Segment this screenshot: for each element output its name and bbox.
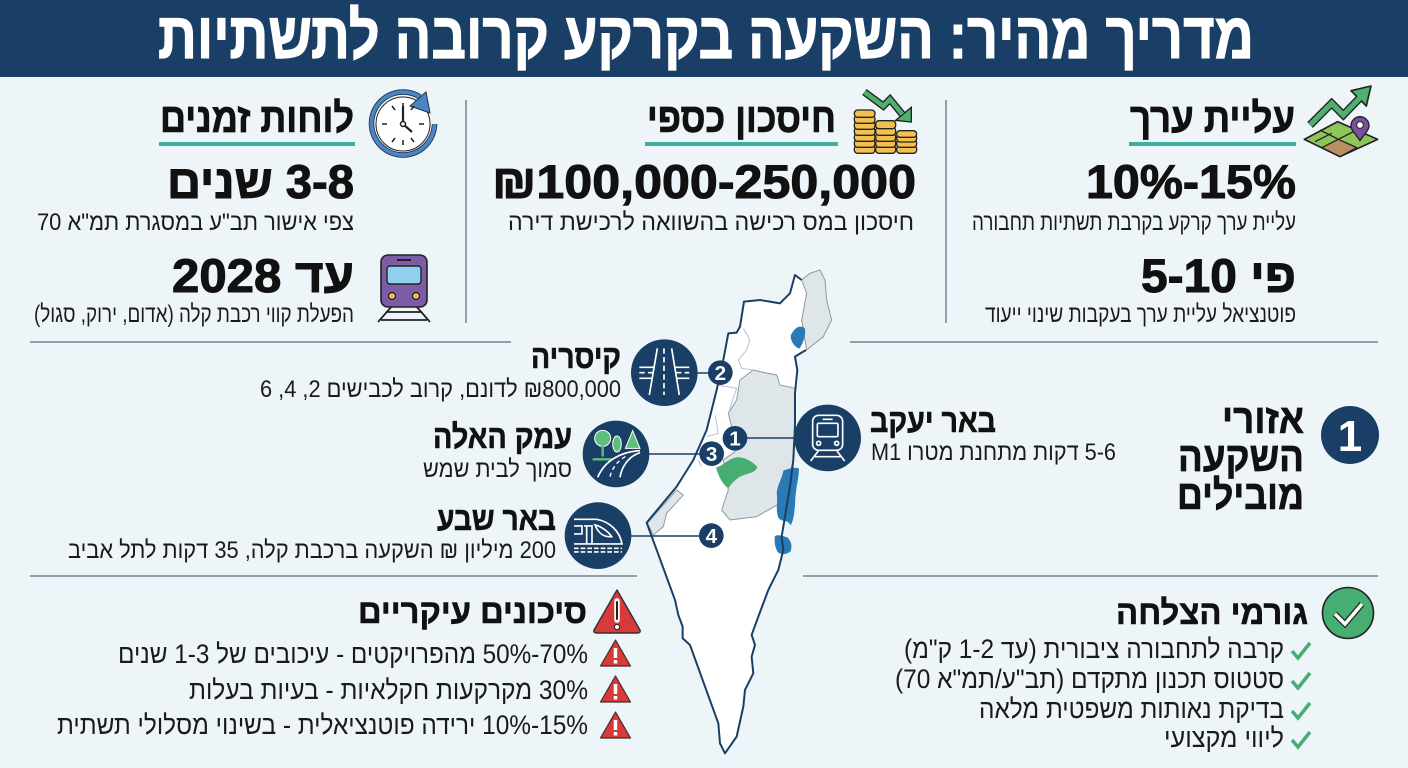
text: purchase tax description: חיסכון במס רכישה בהשוואה לרכישת דירה [508, 209, 914, 236]
location: Be'er Sheva [68, 500, 556, 564]
heading: timelines: לוחות זמנים [160, 95, 354, 141]
panel: timelines [34, 92, 434, 328]
location: Be'er Sheva: באר שבע [437, 500, 556, 537]
success item 1: קרבה לתחבורה ציבורית (עד 1-2 ק"מ) [904, 634, 1284, 664]
location: Be'er Ya'akov: 5-6 דקות מתחנת מטרו M1 [871, 439, 1116, 466]
stat: 3-8 years: 3-8 שנים [167, 155, 354, 208]
stat: 10%-15%: 10%-15% [1086, 155, 1296, 208]
icon: clock with circular arrow [372, 92, 434, 155]
heading: leading investment areas [1177, 396, 1304, 518]
heading: leading investment areas: אזורי [1222, 396, 1304, 442]
heading: leading investment areas: מובילים [1177, 472, 1304, 518]
text: plan approval description: צפי אישור תב"ע במסגרת תמ"א 70 [37, 209, 354, 236]
success item 2: סטטוס תכנון מתקדם (תב"ע/תמ"א 70) [895, 664, 1284, 694]
map of Israel [647, 270, 832, 753]
stat: savings amount: ₪100,000-250,000 [492, 155, 916, 208]
heading: main risks: סיכונים עיקריים [358, 593, 587, 631]
text: light rail description: הפעלת קווי רכבת קלה (אדום, ירוק, סגול) [34, 301, 354, 328]
panel: financial savings [492, 92, 917, 236]
location: Be'er Ya'akov: באר יעקב [870, 402, 996, 439]
text: zoning description: פוטנציאל עליית ערך בעקבות שינוי ייעוד [985, 301, 1296, 328]
panel: value increase [972, 86, 1378, 328]
risk item 2: 30% מקרקעות חקלאיות - בעיות בעלות [189, 675, 588, 705]
heading: leading investment areas: השקעה [1178, 434, 1304, 480]
section badge 1 [1321, 406, 1379, 464]
location: Caesarea: ₪800,000 לדונם, קרוב לכבישים 2, 4, 6 [260, 376, 621, 403]
text: land value description: עליית ערך קרקע בקרבת תשתיות תחבורה [972, 209, 1296, 236]
marker 4 [699, 523, 724, 548]
location: Caesarea [260, 338, 621, 403]
icon: purple light rail train [378, 255, 430, 322]
marker 3 [699, 441, 724, 466]
connector lines [598, 373, 828, 536]
marker 3: 3 [706, 443, 717, 466]
panel: main risks [57, 590, 640, 740]
location: Elah Valley: סמוך לבית שמש [423, 456, 572, 483]
icon: metro train [794, 405, 861, 471]
location: Caesarea: קיסריה [531, 338, 621, 375]
icon: highway [631, 339, 698, 406]
location: Elah Valley [423, 418, 572, 483]
icon: rising arrow over land plot [1304, 86, 1378, 157]
marker 2 [708, 360, 733, 385]
success item 4: ליווי מקצועי [1164, 723, 1284, 753]
risk item 1: ⁦50%-70%⁩ מהפרויקטים - עיכובים של 1-3 שנים [118, 639, 588, 669]
marker 4: 4 [706, 525, 718, 548]
stat: until 2028: עד 2028 [172, 249, 354, 302]
success item 3: בדיקת נאותות משפטית מלאה [979, 694, 1284, 724]
panel: leading investment areas [68, 338, 1379, 569]
marker 1: 1 [729, 428, 741, 451]
risk item 3: ⁦10%-15%⁩ ירידה פוטנציאלית - בשינוי מסלולי תשתית [57, 710, 588, 740]
marker 2: 2 [715, 362, 726, 385]
icon: coin stacks with falling arrow [854, 92, 917, 153]
heading: success factors: גורמי הצלחה [1116, 594, 1308, 632]
stat: times 5-10: פי 5-10 [1141, 249, 1296, 302]
location: Elah Valley: עמק האלה [433, 418, 572, 455]
panel: success factors [895, 588, 1374, 753]
icon: high-speed train [565, 502, 631, 569]
section badge 1: 1 [1338, 412, 1362, 461]
location: Be'er Sheva: 200 מיליון ₪ השקעה ברכבת קלה, 35 דקות לתל אביב [68, 537, 556, 564]
marker 1 [723, 426, 747, 451]
heading: value increase: עליית ערך [1130, 95, 1295, 141]
icon: green check badge [1322, 588, 1374, 638]
icon: trees and road [583, 421, 649, 487]
icon: large warning triangle [594, 590, 640, 633]
location: Be'er Ya'akov [870, 402, 1116, 466]
heading: financial savings: חיסכון כספי [647, 95, 836, 141]
